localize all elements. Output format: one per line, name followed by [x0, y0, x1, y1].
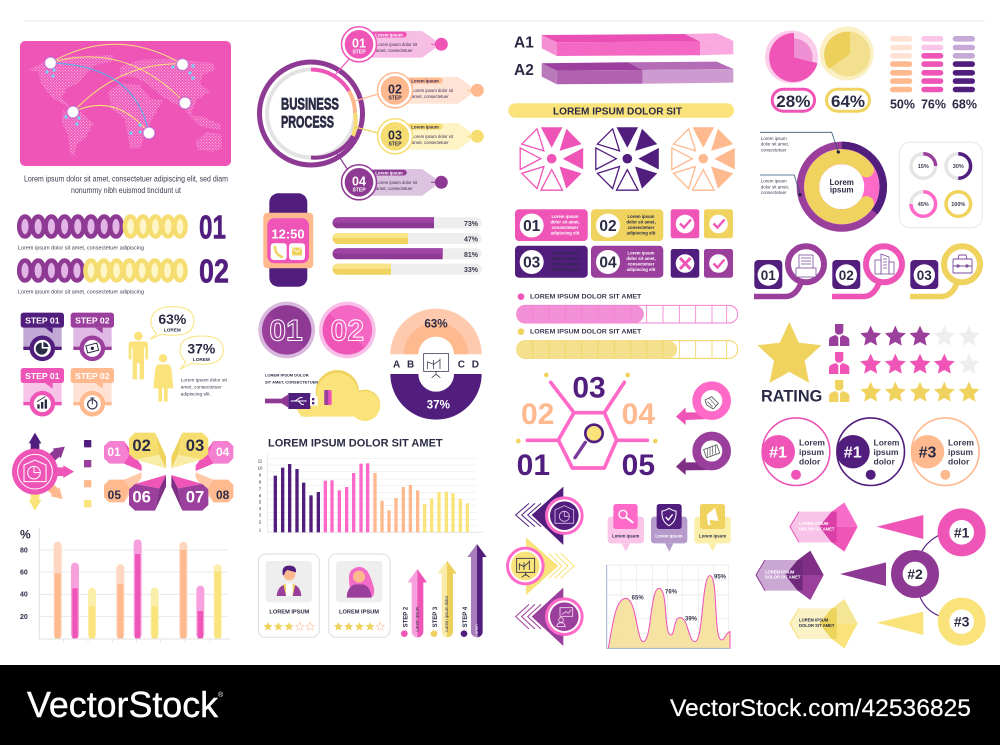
rank labels: #3: [954, 614, 970, 630]
area chart: 95%: [714, 574, 727, 580]
loop arrow: pink: [676, 386, 727, 425]
people caption: adipiscing elit.: [181, 392, 211, 398]
speech tile: megaphone: Lorem ipsum: [699, 533, 726, 538]
badge #3 peach: [911, 418, 979, 486]
heading: business process: [281, 95, 339, 131]
icon tag 01: [754, 246, 824, 296]
step 04 tag: STEP: [352, 188, 366, 194]
split donut chart: C: [458, 359, 465, 370]
card: four percent gauges: [899, 142, 982, 228]
panel: step cards: [12, 307, 233, 642]
3D bar A2: A2: [514, 62, 534, 79]
profile card: woman: LOREM IPSUM: [339, 609, 379, 615]
arrow: step 2: [401, 569, 427, 637]
column chart: 3: [259, 513, 262, 518]
badge #1 pink: #1: [769, 444, 787, 462]
donut captions: dolor sit amet,: [761, 184, 789, 189]
blocks 03 and 04: [171, 433, 233, 471]
progress bars chart: 47%: [464, 236, 479, 244]
map continents: [28, 55, 222, 157]
bar chart: percent: 60: [20, 569, 28, 576]
progress bars chart: 33%: [464, 267, 479, 274]
bar chart: percent: 40: [20, 592, 28, 599]
map caption: [24, 174, 228, 195]
block numbers: 07: [186, 488, 204, 507]
arrow burst: [12, 433, 74, 511]
card: four percent gauges: 100%: [951, 202, 965, 208]
split donut chart: A: [393, 359, 400, 370]
number cards 01-04: Lorem ipsum: [628, 214, 655, 219]
step 03 tag: 03: [388, 128, 402, 142]
3D bar A1: A1: [514, 35, 534, 52]
icon: magnifier: [575, 425, 603, 458]
stacked percent bars: 76%: [921, 98, 946, 112]
heading: chart title: LOREM IPSUM DOLOR SIT AMET: [268, 438, 443, 450]
column chart: 4: [259, 506, 262, 511]
brand logo text: VectorStock: [27, 684, 219, 725]
step 04 tag: Lorem ipsum dolor sit: [376, 180, 418, 185]
step card peach: [71, 368, 114, 414]
map caption: Lorem ipsum dolor sit amet, consectetuer adipiscing elit, sed diam: [24, 174, 228, 184]
number cards 01-04: adipiscing elit: [627, 230, 656, 236]
bubble 63%: [150, 307, 194, 339]
registered mark: ®: [218, 691, 224, 699]
arrow icon: board: [506, 537, 574, 595]
segmented progress bars: LOREM IPSUM DOLOR SIT AMET: [530, 294, 641, 301]
ring row 01: 01: [199, 208, 226, 246]
icon tag 03: 03: [917, 268, 932, 283]
number cards 01-04: Lorem ipsum: [552, 250, 579, 256]
icon: smart watch: 12:50: [271, 226, 305, 241]
step 01 tag: Lorem ipsum dolor sit: [376, 42, 418, 47]
wheel icon: pink: [520, 127, 583, 190]
stacked percent bars: 68%: [952, 98, 977, 112]
block numbers: 04: [216, 445, 230, 459]
wheel icon: peach: [672, 127, 735, 190]
area chart: 39%: [685, 616, 698, 622]
column chart: [258, 453, 483, 532]
speech tile: search: [608, 504, 644, 552]
label: rating: RATING: [761, 387, 822, 406]
badge #1 purple: ipsum: [874, 447, 899, 457]
hexagon diagram: 04: [622, 398, 655, 431]
step card pink: STEP 01: [25, 371, 60, 381]
number cards 01-04: dolor sit amet,: [626, 220, 656, 224]
step 04 tag: amet, consectetuer: [376, 186, 413, 191]
speech tile: shield: Lorem ipsum: [655, 533, 683, 538]
donut captions: [761, 136, 789, 195]
column chart: 10: [258, 465, 263, 470]
pie chart: 28%: 28%: [776, 92, 810, 111]
step 02 tag: 02: [388, 82, 402, 96]
badge #1 purple: #1: [844, 444, 862, 462]
step 02 tag: [378, 73, 484, 108]
panel: numbered discs, cloud, chart, profiles: [258, 302, 487, 637]
step card dark purple: STEP 01: [25, 316, 60, 326]
block numbers: [107, 436, 230, 507]
block numbers: 01: [107, 445, 121, 459]
badge #3 peach: dolor: [948, 457, 970, 467]
rank labels: [907, 524, 970, 630]
number cards 01-04: adipiscing elit: [551, 267, 580, 272]
bubble 37%: 37%: [187, 340, 216, 356]
disc 02: 02: [331, 315, 364, 348]
bar chart: percent: [20, 527, 231, 642]
number cards 01-04: consectetuer: [628, 262, 655, 266]
arrow: step 2: STEP 2: [403, 606, 409, 627]
arrow icon: presentation: [516, 588, 584, 646]
usb caption: LOREM IPSUM DOLOR: [265, 373, 309, 378]
people caption: Lorem ipsum dolor sit: [181, 378, 227, 384]
bubble 63%: 63%: [158, 311, 187, 327]
map blue markers: [45, 64, 195, 135]
ring row 02: [18, 252, 229, 296]
block numbers: 08: [216, 488, 230, 502]
number cards 01-04: Lorem ipsum: [628, 250, 655, 256]
donut captions: consectetuer: [761, 190, 787, 195]
icon tag 01: 01: [761, 268, 776, 283]
number cards 01-04: Lorem ipsum: [552, 214, 579, 219]
column chart: 1: [259, 527, 262, 532]
number cards 01-04: adipiscing elit: [627, 267, 656, 272]
split donut chart: 63%: [424, 318, 448, 331]
step 04 tag: 04: [352, 174, 366, 188]
icon: smart watch: [263, 193, 313, 287]
split donut chart: [390, 309, 482, 420]
progress bars chart: [332, 217, 482, 275]
image url: VectorStock.com/42536825: [670, 695, 971, 722]
number cards 01-04: [515, 209, 663, 278]
heading: business process: PROCESS: [281, 113, 334, 131]
ring row 02: Lorem ipsum dolor sit amet, consectetuer adipiscing: [18, 290, 144, 296]
column chart: 6: [259, 493, 262, 498]
pointer triangles: [840, 515, 923, 635]
number cards 01-04: adipiscing elit: [551, 230, 580, 236]
person icons: [829, 324, 849, 402]
tag 2 purple: DOLOR SIT AMET: [765, 575, 801, 580]
arrow: step 2: Lorem ipsum: [414, 606, 419, 632]
donut leader lines: [760, 132, 838, 194]
tag 1 pink: LOREM IPSUM: [799, 521, 829, 526]
panel: ranked arrows and hex tags: [756, 502, 980, 648]
hexagon diagram: [516, 371, 658, 482]
card: four percent gauges: 15%: [918, 164, 929, 170]
step 01 tag: [342, 27, 448, 62]
arrow icon: pie: [516, 487, 584, 545]
number cards 01-04: 04: [599, 254, 617, 272]
column chart: 2: [259, 519, 262, 524]
blocks 01 and 02: [104, 433, 166, 471]
block numbers: 06: [132, 488, 151, 507]
step 03 tag: [378, 119, 484, 154]
segmented progress bars: [516, 293, 738, 358]
tag 2 purple: LOREM IPSUM: [765, 569, 795, 574]
panel: world map: [20, 41, 231, 166]
progress bars chart: 73%: [464, 221, 479, 228]
badge #3 peach: Lorem: [948, 438, 974, 448]
map nodes: [44, 57, 191, 139]
profile card: man: LOREM IPSUM: [269, 609, 310, 615]
badge #1 pink: dolor: [799, 457, 821, 467]
icon tag 02: 02: [839, 268, 854, 283]
donut captions: consectetuer: [761, 147, 787, 152]
progress bars chart: 81%: [464, 252, 479, 259]
footer bar: [0, 665, 1000, 745]
rank labels: #2: [907, 566, 923, 582]
icon: woman: [153, 354, 173, 402]
step card purple: STEP 02: [75, 316, 110, 326]
panel: progress, hexagon, arrows and area chart: [506, 293, 738, 648]
column chart: 11: [258, 458, 263, 463]
step 03 tag: amet, consectetuer: [412, 140, 449, 145]
donut captions: Lorem ipsum: [761, 136, 787, 141]
loop arrow: purple: [676, 436, 727, 475]
tag 1 pink: DOLOR SIT AMET: [799, 526, 835, 531]
usb caption: SIT AMET, CONSECTETUER: [265, 379, 318, 384]
step 04 tag: [342, 165, 448, 200]
ring row 02: 02: [199, 252, 229, 290]
block numbers: 02: [132, 436, 151, 455]
area chart: 76%: [665, 589, 678, 595]
step 02 tag: Lorem ipsum dolor sit: [412, 88, 454, 93]
donut chart: lorem ipsum: ipsum: [830, 186, 853, 195]
pie chart: 28%: [765, 30, 818, 111]
bubble 37%: [180, 336, 223, 369]
donut chart: lorem ipsum: [760, 132, 883, 228]
badge #1 purple: dolor: [874, 457, 895, 467]
badge #3 peach: ipsum: [948, 447, 973, 457]
arrow: step 3: Lorem ipsum dolor: [444, 595, 449, 632]
column chart: 5: [259, 500, 262, 505]
hexagon diagram: 01: [517, 449, 550, 482]
step 02 tag: amet, consectetuer: [412, 94, 449, 99]
split donut chart: D: [472, 359, 479, 370]
column chart: 9: [259, 472, 262, 477]
disc 01: 01: [269, 315, 303, 348]
arrow: step 4: [461, 544, 487, 637]
hexagon diagram: 03: [572, 371, 606, 404]
blocks 05 and 06: [104, 472, 166, 511]
arrow: step 4: Lorem: [474, 624, 479, 637]
card: four percent gauges: 30%: [953, 164, 964, 170]
number cards 01-04: consectetuer: [552, 225, 579, 230]
arrow: step 3: [431, 561, 457, 637]
heading: business process: BUSINESS: [281, 95, 339, 113]
disc 01: [258, 302, 315, 358]
icon: usb plug: [265, 390, 332, 409]
pie chart: 64%: [820, 26, 874, 111]
bar chart: percent: 80: [20, 547, 28, 554]
ring row 01: [18, 208, 226, 252]
number cards 01-04: 02: [599, 218, 617, 235]
stacked percent bars: [890, 36, 977, 112]
banner: lorem ipsum dolor sit: [508, 103, 734, 118]
rank labels: #1: [954, 524, 970, 540]
banner: lorem ipsum dolor sit: LOREM IPSUM DOLOR SIT: [553, 105, 683, 117]
column chart: 8: [259, 479, 262, 484]
column chart: 7: [259, 486, 262, 491]
step 02 tag: Lorem ipsum: [411, 78, 439, 83]
legend squares: [84, 440, 91, 507]
ring row 01: Lorem ipsum dolor sit amet, consectetuer adipiscing: [18, 246, 144, 252]
step 01 tag: STEP: [352, 50, 366, 56]
badge #1 purple: [836, 418, 904, 486]
map connection arcs: [50, 44, 185, 133]
bubble 63%: LOREM: [164, 327, 181, 332]
icon: big star: [757, 322, 821, 383]
number cards 01-04: consectetuer: [552, 262, 579, 266]
step card dark purple: [21, 313, 64, 359]
butterfly blocks: [104, 433, 233, 511]
icon tag 03: [910, 246, 980, 296]
people caption: amet, consectetuer: [181, 385, 222, 391]
step card purple: [71, 313, 114, 359]
speech tile: shield: [651, 504, 687, 552]
3D bar A2: [514, 62, 733, 84]
area chart: 65%: [632, 595, 644, 601]
segmented progress bars: LOREM IPSUM DOLOR SIT AMET: [530, 329, 641, 336]
connectors: [920, 535, 939, 616]
usb caption: [265, 373, 318, 384]
tag 2 purple: [756, 551, 824, 600]
arrow: step 4: STEP 4: [463, 606, 469, 627]
blocks 07 and 08: [171, 472, 233, 511]
rank rings: [897, 514, 980, 640]
panel: business process circle: [260, 62, 362, 165]
check icons: [671, 209, 733, 278]
bar chart: percent: %: [20, 527, 31, 541]
map caption: nonummy nibh euismod tincidunt ut: [71, 186, 182, 195]
tag 3 yellow: DOLOR SIT AMET: [799, 623, 835, 628]
number cards 01-04: dolor sit amet,: [626, 256, 656, 261]
profile card: woman: [329, 554, 390, 637]
people caption: [181, 378, 227, 398]
pie chart: 64%: 64%: [831, 92, 865, 111]
hexagon diagram: 05: [622, 449, 655, 482]
wheel icon: purple: [596, 127, 659, 190]
badge #1 pink: Lorem: [799, 438, 825, 448]
step 03 tag: Lorem ipsum dolor sit: [412, 134, 454, 139]
badge #1 purple: Lorem: [874, 438, 900, 448]
bar chart: percent: 20: [20, 614, 28, 621]
step 01 tag: 01: [352, 36, 366, 50]
block numbers: 03: [186, 436, 204, 455]
card: four percent gauges: 45%: [918, 202, 929, 208]
block numbers: 05: [108, 488, 121, 502]
hexagon diagram: 02: [521, 398, 554, 431]
stacked percent bars: 50%: [890, 98, 915, 112]
tag 1 pink: [790, 502, 858, 552]
icon: cloud: [297, 370, 380, 421]
tag 3 yellow: [790, 599, 858, 648]
step 03 tag: Lorem ipsum: [411, 124, 439, 129]
step card peach: STEP 02: [75, 371, 110, 381]
number cards 01-04: 03: [523, 254, 541, 272]
icon: man: [129, 332, 148, 379]
split donut chart: B: [407, 359, 414, 370]
connector lines for steps: [335, 58, 378, 170]
number cards 01-04: consectetuer: [628, 225, 655, 230]
number cards 01-04: dolor sit amet,: [550, 256, 580, 261]
donut captions: dolor sit amet,: [761, 142, 789, 147]
number cards 01-04: dolor sit amet,: [550, 220, 580, 224]
step 03 tag: STEP: [388, 142, 402, 148]
step 02 tag: STEP: [388, 96, 402, 102]
star rows: [860, 326, 979, 402]
step 01 tag: amet, consectetuer: [376, 48, 413, 53]
arrow: step 3: STEP 3: [433, 606, 439, 627]
panel: rating: [757, 322, 979, 406]
tag 3 yellow: LOREM IPSUM: [799, 618, 829, 623]
profile card: man: [258, 554, 319, 637]
disc 02: [319, 302, 376, 358]
badge #1 pink: [762, 418, 830, 486]
speech tile: megaphone: [694, 504, 731, 552]
step 04 tag: Lorem ipsum: [375, 170, 403, 175]
donut chart: lorem ipsum: Lorem: [829, 178, 854, 187]
bubble 37%: LOREM: [193, 357, 210, 362]
step card pink: [21, 368, 64, 414]
icon tag 02: [832, 246, 902, 296]
step 01 tag: Lorem ipsum: [375, 32, 403, 37]
badge #1 pink: ipsum: [799, 447, 824, 457]
badge #3 peach: #3: [919, 444, 936, 462]
number cards 01-04: 01: [523, 218, 541, 235]
donut captions: Lorem ipsum: [761, 179, 787, 184]
area chart: [607, 565, 731, 648]
speech tile: search: Lorem ipsum: [612, 533, 639, 538]
split donut chart: 37%: [427, 398, 451, 411]
3D bar A1: [514, 33, 733, 56]
